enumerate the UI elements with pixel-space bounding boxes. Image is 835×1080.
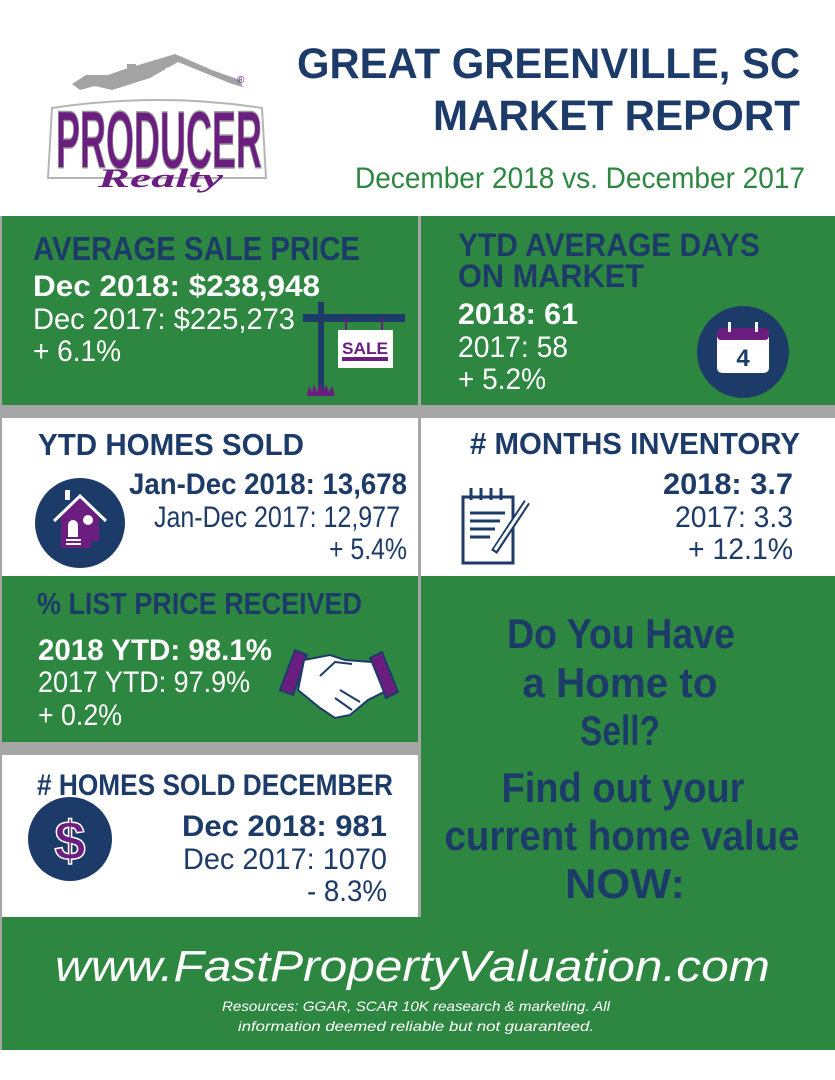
callout: home value cta (444, 610, 800, 907)
panel: months inventory (463, 426, 800, 566)
panel: ytd homes sold (35, 427, 407, 568)
panel backgrounds (0, 216, 835, 1050)
panel: average sale price (33, 230, 405, 396)
icon: sale sign: SALE (342, 339, 388, 358)
logo: Producer Realty: ® (237, 75, 245, 86)
panel: list price received: 2018 YTD: 98.1% (38, 634, 272, 667)
subtitle: December 2018 vs. December 2017 (355, 162, 805, 195)
icon: dollar: $ (54, 809, 86, 872)
panel: days on market: + 5.2% (458, 363, 546, 396)
footer: resources note: Resources: GGAR, SCAR 10K reasearch & marketing. All (222, 998, 611, 1014)
icon: house (35, 478, 125, 568)
panel: days on market: ON MARKET (458, 258, 644, 294)
icon: handshake (280, 650, 398, 718)
panel: average sale price: Dec 2018: $238,948 (33, 270, 320, 303)
title: MARKET REPORT (433, 92, 800, 140)
panel: months inventory: + 12.1% (688, 533, 793, 566)
panel: list price received: + 0.2% (38, 699, 122, 732)
logo: Producer Realty (48, 54, 266, 193)
callout: home value cta: Do You Have (507, 610, 735, 657)
callout: home value cta: a Home to (522, 659, 718, 706)
panel: homes sold december: Dec 2018: 981 (182, 810, 387, 843)
panel: list price received: % LIST PRICE RECEIVED (37, 586, 362, 621)
panel: days on market: 2018: 61 (458, 298, 578, 331)
panel: months inventory: 2017: 3.3 (675, 501, 793, 534)
panel: months inventory: 2018: 3.7 (663, 468, 793, 501)
panel: ytd homes sold: Jan-Dec 2018: 13,678 (129, 468, 407, 501)
panel: average sale price: Dec 2017: $225,273 (33, 303, 295, 336)
icon: sale sign (303, 302, 405, 396)
callout: home value cta: NOW: (565, 860, 685, 907)
panel: months inventory: # MONTHS INVENTORY (470, 426, 800, 461)
footer: resources note: information deemed reliable but not guaranteed. (238, 1018, 594, 1034)
icon: dollar (28, 797, 112, 881)
panel: list price received: 2017 YTD: 97.9% (38, 666, 250, 699)
panel: days on market: 2017: 58 (458, 331, 568, 364)
panel: ytd homes sold: Jan-Dec 2017: 12,977 (154, 501, 400, 534)
panel: homes sold december: Dec 2017: 1070 (183, 843, 387, 876)
title (297, 40, 800, 140)
panel: homes sold december: - 8.3% (307, 875, 387, 908)
icon: calendar (697, 306, 789, 398)
panel: homes sold december: # HOMES SOLD DECEMBER (37, 769, 393, 802)
panel: average sale price: AVERAGE SALE PRICE (33, 230, 360, 267)
icon: notepad (463, 488, 527, 563)
footer: resources note (222, 998, 611, 1034)
callout: home value cta: current home value (444, 812, 800, 859)
panel: ytd homes sold: YTD HOMES SOLD (38, 427, 304, 462)
panel: ytd homes sold: + 5.4% (329, 533, 407, 566)
panel: list price received (37, 586, 398, 732)
panel: days on market: YTD AVERAGE DAYS (458, 227, 760, 263)
panel: average sale price: + 6.1% (33, 335, 121, 368)
title: GREAT GREENVILLE, SC (297, 40, 800, 88)
footer: website: www.FastPropertyValuation.com (55, 942, 770, 991)
panel: days on market (458, 227, 789, 398)
callout: home value cta: Find out your (502, 764, 744, 811)
callout: home value cta: Sell? (580, 707, 660, 754)
panel: homes sold december (28, 769, 393, 908)
icon: calendar: 4 (736, 345, 750, 372)
logo: Producer Realty: Realty (96, 164, 224, 193)
text: PRODUCER (56, 95, 262, 186)
